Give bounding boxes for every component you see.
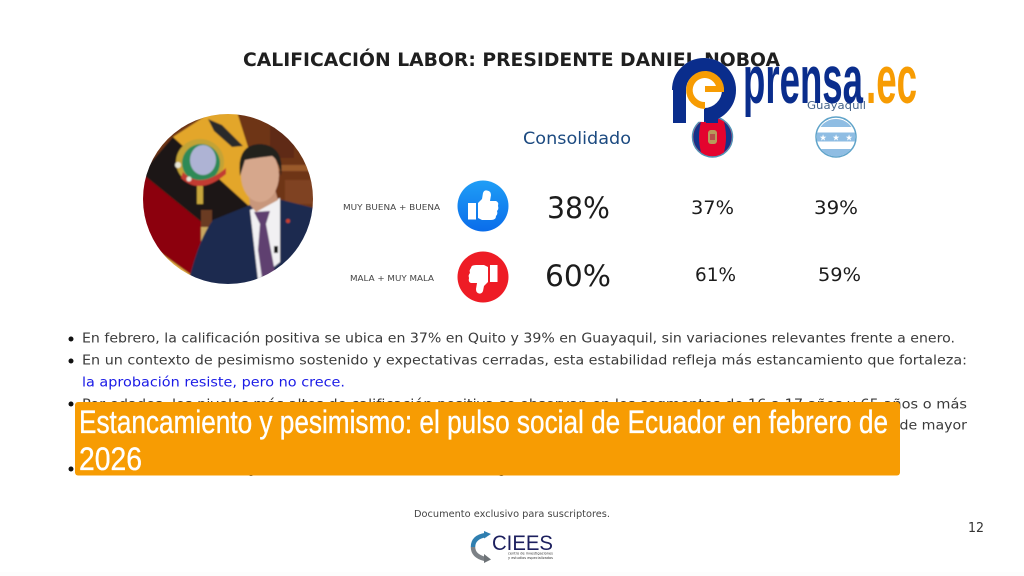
value: Quito negative: 61% (695, 264, 736, 286)
icon: Guayaquil flag: ★ (819, 134, 827, 144)
icon: Guayaquil flag: ★ (845, 134, 853, 144)
shirt (250, 198, 280, 280)
headline text: 2026 (79, 441, 142, 477)
icon: Guayaquil flag: ★ (832, 134, 840, 144)
tie (254, 211, 275, 278)
bullet text block: gobierno se sostiene en los últimos meses sin (248, 461, 498, 477)
icon: Quito flag (692, 117, 732, 157)
neck and face (248, 190, 278, 213)
logo: prensa.ec: .ec (866, 42, 917, 118)
column header: Guayaquil: Guayaquil (807, 99, 866, 112)
logo: prensa.ec (672, 42, 917, 123)
coat of arms (174, 138, 224, 177)
logo: CIEES: centro de investigaciones (508, 550, 553, 556)
suit (188, 200, 316, 288)
bullet text block: giros (498, 461, 528, 477)
headline text (79, 404, 888, 477)
bullet text block: la aprobación resiste, pero no crece. (82, 374, 345, 390)
row label: negative: MALA + MUY MALA (350, 274, 435, 283)
value: Guayaquil negative: 59% (818, 264, 861, 286)
footer note: Documento exclusivo para suscriptores. (414, 509, 610, 520)
value: consolidated negative: 60% (545, 259, 611, 293)
bullet text block: En febrero, la calificación positiva se ubica en 37% en Quito y 39% en Guayaquil, sin variaciones relevantes frente a enero. (82, 330, 955, 346)
logo: CIEES: CIEES (492, 532, 553, 555)
column header: Quito (mostly hidden): Quito (700, 99, 724, 111)
bullet text block: mientras que los grupos de edad intermedia registran una evaluación menos favorable y concentran las opiniones de mayor (82, 418, 967, 434)
president photo (140, 110, 316, 288)
icon: thumbs up (458, 180, 508, 232)
row label: positive: MUY BUENA + BUENA (343, 203, 441, 212)
logo: CIEES (473, 531, 553, 563)
bullet text block: En un contexto de pesimismo sostenido y expectativas cerradas, esta estabilidad refleja más estancamiento que fortaleza: (82, 352, 967, 368)
page number: 12 (968, 521, 984, 536)
column header: Consolidado: Consolidado (523, 129, 631, 149)
bullet text block: Por edades, los niveles más altos de calificación positiva se observan en los segmentos de 16 a 17 años y 65 años o más (82, 396, 967, 412)
title: CALIFICACIÓN LABOR: PRESIDENTE DANIEL NOBOA (243, 47, 780, 71)
value: consolidated positive: 38% (547, 191, 610, 225)
icon: Guayaquil flag (816, 117, 856, 157)
bullet text block (68, 330, 967, 477)
headline banner (75, 402, 900, 477)
logo: CIEES: y estudios especializados (508, 555, 553, 560)
value: Guayaquil positive: 39% (814, 197, 858, 219)
icon: thumbs down (458, 252, 508, 302)
bullet text block: Este resultado de la valoración del (82, 461, 248, 477)
logo: prensa.ec: prensa (743, 42, 864, 118)
value: Quito positive: 37% (691, 197, 734, 219)
